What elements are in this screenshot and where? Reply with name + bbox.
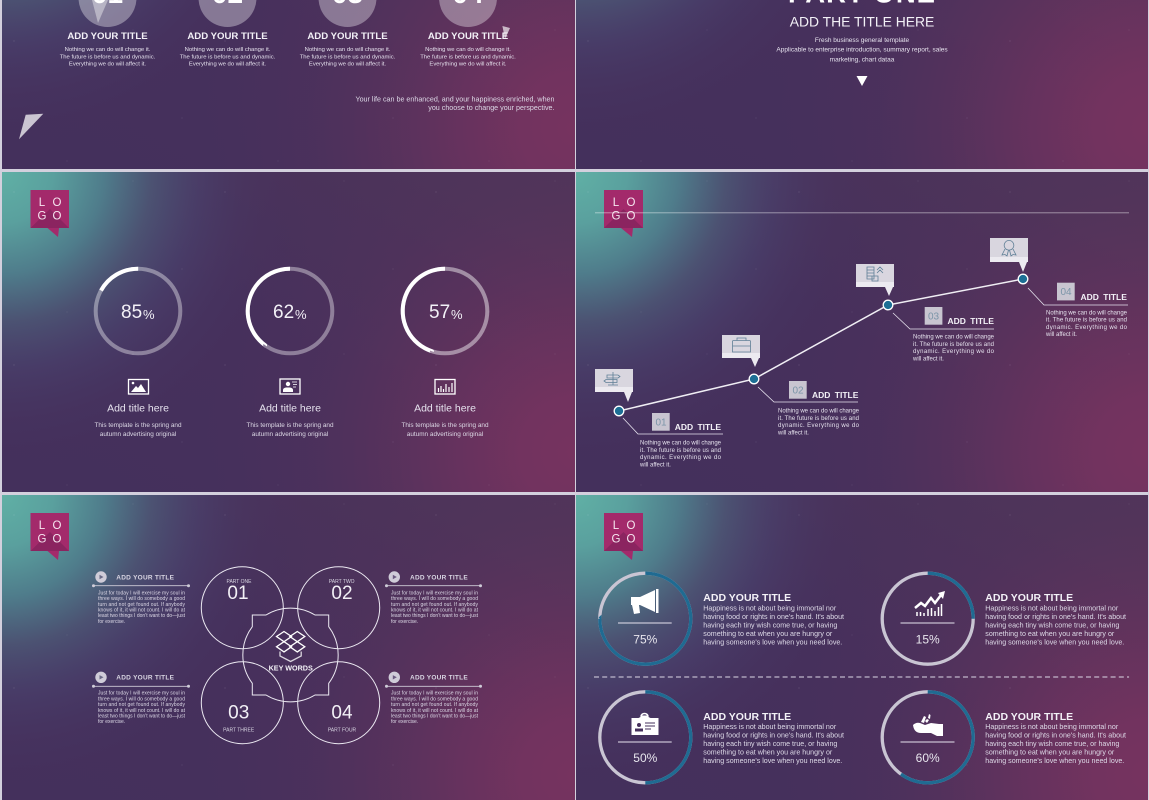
stat text 2: ADD YOUR TITLE (985, 592, 1073, 604)
number badge 01 (78, 0, 136, 27)
stat text 2: having food or rights in one's hand. It's about (985, 613, 1126, 621)
text block top left: knows of it, it will not count. I will do at (98, 608, 186, 614)
stat text 3: having each tiny wish come true, or having (703, 740, 837, 748)
circle 02: 02 (331, 583, 353, 604)
stat text 3 (703, 711, 844, 765)
step 03: it. The future is before us and (913, 342, 994, 348)
small flag triangle (502, 26, 510, 39)
donut 57%: 57 (429, 302, 450, 323)
stat text 3: having someone's love when you need love. (703, 757, 842, 765)
text block 2: ADD YOUR TITLE (187, 31, 268, 42)
text block bottom left: turn and not get found out. If anybody (98, 702, 186, 708)
circle 03 (201, 662, 283, 744)
stat text 2: having someone's love when you need love. (985, 638, 1124, 646)
top rule (595, 212, 1129, 213)
stat text 4 (985, 711, 1126, 765)
text block 4 (420, 31, 516, 68)
stat text 1: something to eat when you are hungry or (703, 630, 833, 638)
step 04: will affect it. (1045, 332, 1077, 338)
stat ring 60%: 60% (916, 751, 940, 765)
step 01: 01 (655, 418, 667, 428)
number badge 03 (318, 0, 376, 27)
stat text 4: having each tiny wish come true, or having (985, 740, 1119, 748)
text block 2 (180, 31, 276, 68)
logo: O (627, 210, 636, 222)
logo (604, 513, 643, 560)
decorative triangle on badge (92, 0, 108, 23)
column 1 text (94, 402, 182, 438)
stat ring 75% (600, 573, 691, 664)
icon: picture (128, 380, 148, 394)
step 02: Nothing we can do will change (778, 409, 860, 415)
column 3 text (401, 402, 489, 438)
quote text (355, 95, 555, 112)
circle 02 (298, 567, 380, 649)
circle 04: 04 (331, 702, 353, 724)
logo: G (612, 534, 621, 546)
step 02: will affect it. (777, 430, 809, 436)
step 04: it. The future is before us and (1046, 318, 1127, 324)
text block 4: The future is before us and dynamic. (420, 54, 516, 60)
stat text 3: having food or rights in one's hand. It's about (703, 731, 844, 739)
text block top left: three ways. I will do somebody a good (98, 596, 185, 602)
logo: L (613, 197, 620, 209)
stat text 1: ADD YOUR TITLE (703, 592, 791, 604)
text block top right: least two things I don't want to do—just (391, 613, 479, 619)
text block 1: Everything we do will affect it. (69, 62, 146, 68)
donut 85% (80, 253, 196, 369)
text block top left: for exercise. (98, 619, 125, 625)
step 04 (1028, 283, 1128, 338)
circle 02: PART TWO (329, 579, 355, 585)
step 04: 04 (1060, 287, 1072, 298)
stat text 1: Happiness is not about being immortal nor (703, 604, 837, 612)
step 02 (758, 381, 860, 436)
callout icon: signpost (595, 369, 633, 402)
text block bottom right: ADD YOUR TITLE (410, 675, 468, 682)
text block 3: The future is before us and dynamic. (300, 54, 396, 60)
number badge 02 (198, 0, 256, 27)
circle 01: 01 (227, 583, 249, 604)
column 3 text: autumn advertising original (407, 431, 483, 438)
text block bottom right: three ways. I will do somebody a good (391, 696, 478, 702)
step 01: ADD TITLE (675, 422, 721, 432)
panel: slide 6, four stats (576, 495, 1148, 800)
donut 85%: 85 (121, 302, 142, 323)
text block bottom right: knows of it, it will not count. I will do at (391, 708, 479, 714)
circle 03: 03 (228, 702, 249, 724)
stat text 2: having each tiny wish come true, or having (985, 621, 1119, 629)
text block 1 (60, 31, 156, 68)
callout icon: coins and arrows (856, 264, 894, 296)
step 01: dynamic. Everything we do (640, 455, 722, 461)
text block 3 (300, 31, 396, 68)
stat ring 15%: 15% (916, 632, 940, 646)
stat text 2 (985, 592, 1126, 646)
text block 1: ADD YOUR TITLE (67, 31, 148, 42)
text block 3: Everything we do will affect it. (309, 62, 386, 68)
logo: O (53, 534, 62, 546)
stat text 4: having food or rights in one's hand. It's about (985, 731, 1126, 739)
logo (30, 190, 69, 237)
text block bottom left: knows of it, it will not count. I will do at (98, 708, 186, 714)
text block top right: for exercise. (391, 619, 418, 625)
icon: open box (276, 632, 305, 662)
step 03: 03 (928, 312, 939, 322)
text block 3: ADD YOUR TITLE (307, 31, 388, 42)
line chart (614, 274, 1028, 416)
logo: L (39, 197, 46, 209)
stat text 4: Happiness is not about being immortal nor (985, 723, 1119, 731)
text block top right: ADD YOUR TITLE (410, 574, 468, 581)
step 02: it. The future is before us and (778, 416, 859, 422)
column 1 text: This template is the spring and (94, 422, 182, 429)
subtitle: ADD THE TITLE HERE (790, 14, 934, 30)
icon: bar chart (435, 380, 455, 394)
panel: slide 4, growth timeline (576, 172, 1148, 492)
icon: id card (280, 379, 300, 394)
description (776, 37, 948, 63)
text block bottom left: least two things I don't want to do—just (98, 714, 186, 720)
description: marketing, chart dataa (830, 56, 895, 63)
text block 4: Nothing we can do will change it. (425, 47, 511, 53)
description: Applicable to enterprise introduction, summary report, sales (776, 47, 948, 54)
text block bottom left: ADD YOUR TITLE (116, 675, 175, 682)
large triangle (19, 114, 43, 139)
step 01: Nothing we can do will change (640, 441, 722, 447)
step 02: 02 (792, 386, 804, 396)
column 2 text: This template is the spring and (246, 422, 334, 429)
donut 57%: % (451, 307, 463, 322)
logo: O (53, 520, 62, 532)
text block 4: ADD YOUR TITLE (428, 31, 509, 42)
text block 2: Everything we do will affect it. (189, 62, 266, 68)
logo: L (613, 520, 620, 532)
text block 1: Nothing we can do will change it. (65, 47, 151, 53)
logo: O (627, 197, 636, 209)
callout icon: briefcase (722, 335, 760, 367)
text block top right (385, 571, 482, 625)
stat text 3: Happiness is not about being immortal nor (703, 723, 837, 731)
step 02: dynamic. Everything we do (778, 423, 860, 429)
text block bottom right: least two things I don't want to do—just (391, 714, 479, 720)
description: Fresh business general template (815, 37, 910, 44)
text block 1: The future is before us and dynamic. (60, 54, 156, 60)
text block top left: ADD YOUR TITLE (116, 574, 175, 581)
stat ring 50% (600, 692, 691, 783)
donut 62%: % (295, 307, 307, 322)
step 03: Nothing we can do will change (913, 335, 995, 341)
label: key words: KEY WORDS (269, 664, 313, 672)
step 01: it. The future is before us and (640, 448, 721, 454)
step 04: dynamic. Everything we do (1046, 325, 1128, 331)
icon: badge (632, 714, 658, 735)
stat ring 15% (882, 573, 973, 664)
number badge 04 (439, 0, 497, 27)
logo: O (627, 520, 636, 532)
logo (604, 190, 643, 237)
step 01 (623, 413, 723, 468)
circle 04 (298, 662, 380, 744)
stat text 1: having someone's love when you need love. (703, 638, 842, 646)
text block top right: three ways. I will do somebody a good (391, 596, 478, 602)
quote text: you choose to change your perspective. (428, 104, 555, 112)
column 3 text: Add title here (414, 402, 476, 414)
stat text 4: ADD YOUR TITLE (985, 711, 1073, 723)
step 04: ADD TITLE (1080, 292, 1127, 302)
stat text 1 (703, 592, 844, 646)
callout icon: award ribbon (990, 238, 1028, 272)
text block bottom right: for exercise. (391, 719, 418, 725)
stat ring 50%: 50% (633, 751, 658, 765)
icon: growth chart (915, 591, 945, 616)
text block top right: knows of it, it will not count. I will do at (391, 608, 479, 614)
column 3 text: This template is the spring and (401, 422, 489, 429)
step 03 (893, 307, 995, 362)
column 1 text: Add title here (107, 402, 169, 414)
step 03: will affect it. (912, 356, 944, 362)
text block top left: Just for today I will exercise my soul in (98, 590, 185, 596)
logo: G (612, 210, 621, 222)
text block 4: Everything we do will affect it. (429, 62, 507, 68)
text block top right: Just for today I will exercise my soul in (391, 590, 478, 596)
circle 01 (201, 567, 283, 649)
text block top left: least two things I don't want to do—just (98, 613, 186, 619)
column 2 text: Add title here (259, 402, 321, 414)
column 2 text: autumn advertising original (252, 431, 328, 438)
icon: megaphone (631, 589, 658, 614)
logo: G (38, 210, 47, 222)
dashed divider (594, 676, 1129, 678)
logo (30, 513, 69, 560)
step 02: ADD TITLE (812, 390, 859, 400)
icon: hand with leaves (913, 714, 943, 736)
logo: O (627, 534, 636, 546)
text block bottom left: for exercise. (98, 719, 125, 725)
panel: slide 2, part one (576, 0, 1148, 169)
stat text 2: something to eat when you are hungry or (985, 630, 1115, 638)
stat text 4: having someone's love when you need love. (985, 757, 1124, 765)
quote text: Your life can be enhanced, and your happiness enriched, when (355, 95, 555, 103)
step 03: dynamic. Everything we do (913, 349, 995, 355)
central notched shape (243, 608, 338, 702)
stat text 1: having each tiny wish come true, or having (703, 621, 837, 629)
text block 2: The future is before us and dynamic. (180, 54, 276, 60)
circle 03: PART THREE (223, 728, 255, 734)
circle 04: PART FOUR (328, 728, 357, 734)
step 03: ADD TITLE (948, 316, 994, 326)
donut 62% (231, 252, 349, 370)
donut 62%: 62 (273, 302, 294, 323)
step 04: Nothing we can do will change (1046, 310, 1128, 316)
text block 2: Nothing we can do will change it. (185, 47, 271, 53)
panel: slide 1, four titles (2, 0, 575, 169)
donut 57% (392, 258, 498, 364)
stat ring 75%: 75% (633, 632, 658, 646)
stat ring 60% (882, 692, 973, 783)
logo: O (53, 210, 62, 222)
text block bottom right: Just for today I will exercise my soul in (391, 691, 478, 697)
logo: G (38, 534, 47, 546)
text block bottom left (92, 672, 190, 725)
text block 3: Nothing we can do will change it. (305, 47, 391, 53)
logo: O (53, 197, 62, 209)
stat text 4: something to eat when you are hungry or (985, 748, 1115, 756)
panel: slide 3, three percentages (2, 172, 575, 492)
stat text 3: something to eat when you are hungry or (703, 748, 833, 756)
column 1 text: autumn advertising original (100, 431, 176, 438)
text block bottom left: three ways. I will do somebody a good (98, 696, 185, 702)
text block bottom right: turn and not get found out. If anybody (391, 702, 478, 708)
text block bottom left: Just for today I will exercise my soul in (98, 691, 185, 697)
text block top left: turn and not get found out. If anybody (98, 602, 186, 608)
text block top right: turn and not get found out. If anybody (391, 602, 478, 608)
stat text 1: having food or rights in one's hand. It's about (703, 613, 844, 621)
panel: slide 5, key words diagram (2, 495, 575, 800)
text block top left (92, 571, 190, 625)
donut 85%: % (143, 307, 155, 322)
column 2 text (246, 402, 334, 438)
logo: L (39, 520, 46, 532)
circle 01: PART ONE (226, 579, 252, 585)
arrow down (856, 76, 868, 86)
stat text 3: ADD YOUR TITLE (703, 711, 791, 723)
text block bottom right (385, 672, 482, 725)
step 01: will affect it. (639, 462, 671, 468)
stat text 2: Happiness is not about being immortal nor (985, 604, 1119, 612)
